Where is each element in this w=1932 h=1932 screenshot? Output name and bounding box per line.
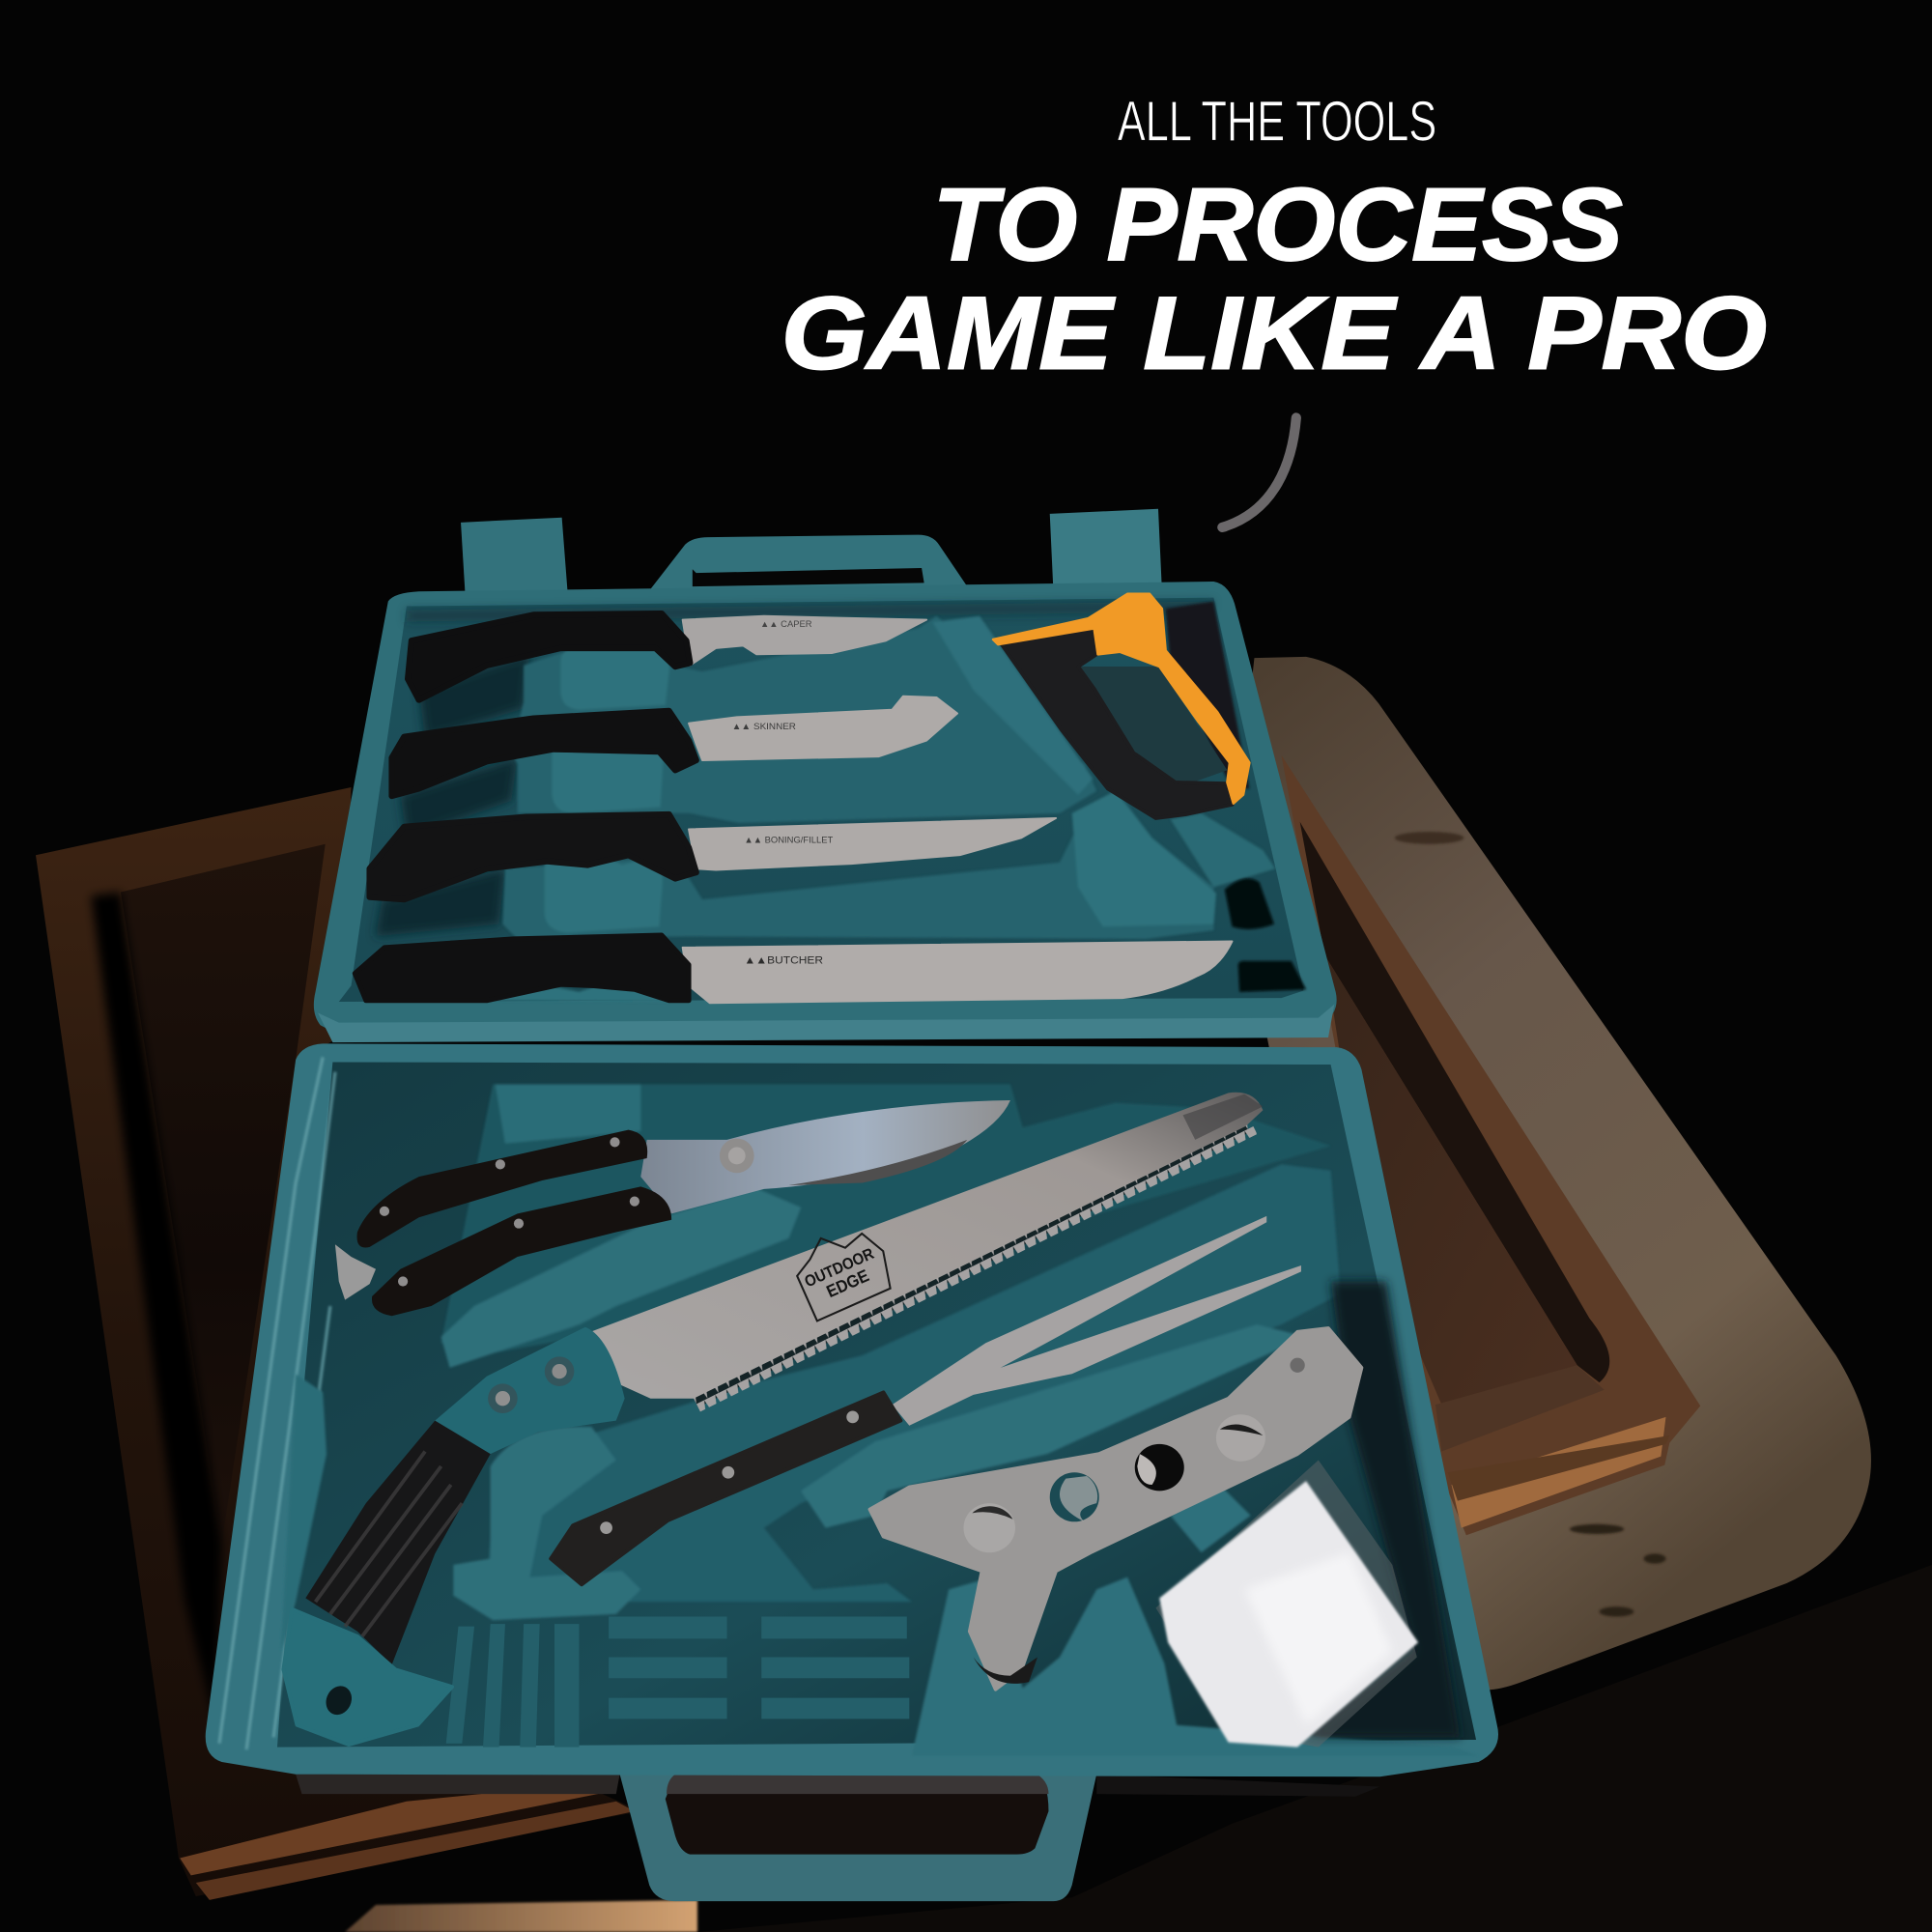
lid carry handle <box>650 535 967 589</box>
wooden table top <box>1233 657 1871 1690</box>
lid recess holes <box>1225 879 1306 992</box>
callout pointer stroke <box>1222 417 1296 527</box>
tray left wedge <box>281 1374 327 1651</box>
saw logo <box>787 1217 898 1321</box>
panel: upper case lid <box>314 509 1337 1042</box>
cutting board left side <box>36 787 640 1900</box>
tray bottom handle <box>296 1773 1380 1901</box>
heading: game like a pro: GAME LIKE A PRO <box>781 274 1767 390</box>
panel: lower case tray <box>206 1043 1498 1901</box>
tray outer shell <box>206 1043 1498 1776</box>
knife: boning / fillet <box>370 814 1056 899</box>
floor glimpse at bottom <box>345 1565 1932 1932</box>
bone shears <box>335 1100 1010 1316</box>
tray side ribs <box>219 1057 335 1749</box>
lid rim highlight <box>318 1005 1334 1042</box>
lid hinge tabs <box>461 509 1162 604</box>
knife: skinner: ▲▲ SKINNER <box>732 722 796 732</box>
knife: boning / fillet: ▲▲ BONING/FILLET <box>744 835 833 845</box>
heading: to process: TO PROCESS <box>933 166 1623 282</box>
lid tray moulding <box>487 616 1275 1002</box>
saw handle <box>435 1327 625 1454</box>
sharpener <box>993 594 1249 818</box>
knife: skinner <box>392 696 957 796</box>
saw logo: OUTDOOR <box>802 1244 877 1291</box>
saw logo: EDGE <box>823 1265 872 1301</box>
table stains <box>1395 832 1665 1616</box>
folding saw <box>283 1093 1263 1745</box>
tray floor ribs <box>446 1616 909 1747</box>
lid inner cavity <box>339 598 1303 1002</box>
lid outer shell <box>314 582 1337 1035</box>
knife: butcher: ▲▲BUTCHER <box>744 954 823 966</box>
tray inner cavity <box>277 1062 1476 1747</box>
gambrel tool <box>870 1328 1361 1690</box>
knife: butcher <box>355 935 1233 1003</box>
lid shadows under handles <box>376 601 1213 936</box>
white gauze bag <box>1155 1460 1418 1747</box>
tray moulding <box>441 1084 1479 1756</box>
knife: caping: ▲▲ CAPER <box>760 619 812 629</box>
heading: all the tools: ALL THE TOOLS <box>1118 90 1436 153</box>
knife: caping <box>408 613 926 699</box>
cutting board right side <box>1282 755 1700 1535</box>
tray rear right shadow <box>1306 1282 1460 1737</box>
carving fork <box>551 1216 1301 1584</box>
